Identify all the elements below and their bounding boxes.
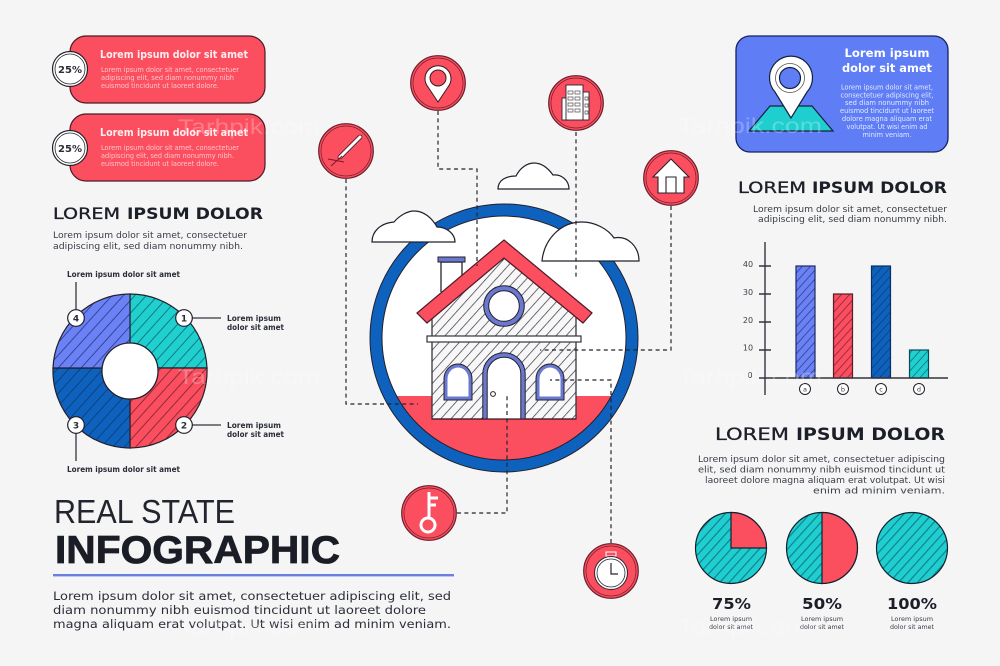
leader lines (76, 282, 221, 461)
blue card body: dolore magna aliquam erat (842, 115, 932, 123)
segment 3 blue (53, 368, 130, 448)
text block: pie section (698, 455, 946, 496)
stat: 100% (887, 595, 937, 631)
icon: stopwatch badge (584, 544, 638, 598)
connector: home (540, 206, 671, 350)
round window (486, 288, 522, 324)
card 2 body (101, 144, 239, 168)
donut label 3: Lorem ipsum dolor sit amet (67, 465, 180, 474)
blue card background (736, 36, 948, 152)
marker 4: 4 (73, 314, 79, 324)
stat: 75%: dolor sit amet (709, 623, 753, 631)
floor band (427, 336, 581, 342)
marker 2 (176, 417, 192, 433)
ground (397, 396, 611, 460)
chart: bars (743, 242, 948, 395)
axes (759, 242, 948, 395)
blue card title: Lorem ipsum (844, 46, 930, 60)
blue card body: Lorem ipsum dolor sit amet, (841, 84, 933, 92)
text block: pie section: elit, sed diam nonummy nibh euismod tincidunt ut (698, 466, 946, 476)
heading: bar chart section: IPSUM DOLOR (812, 178, 947, 197)
badge 25% second (52, 130, 88, 166)
text block: intro: Lorem ipsum dolor sit amet, consectetuer adipiscing elit, sed (53, 589, 451, 603)
y axis labels: 0 (747, 371, 753, 380)
y axis labels: 40 (743, 260, 753, 269)
donut label 2: Lorem ipsum (227, 421, 281, 430)
connector: pencil (346, 179, 418, 404)
right window (538, 366, 562, 398)
icon: map pin (749, 56, 833, 131)
text block: left section: adipiscing elit, sed diam nonummy nibh. (53, 242, 243, 252)
bar c (872, 266, 890, 378)
stat: 50%: dolor sit amet (800, 623, 844, 631)
heading: pie section: IPSUM DOLOR (796, 425, 945, 445)
heading: bar chart section: LOREM (738, 178, 806, 197)
badge 25%: 25% (58, 65, 82, 76)
watermarks: Tarhpik.com (178, 616, 320, 639)
donut label 1: dolor sit amet (227, 323, 284, 332)
icon: pin badge (411, 56, 465, 110)
chimney (438, 257, 465, 292)
watermarks: Tarhpik.com (678, 616, 822, 639)
x axis labels: b (841, 386, 845, 394)
marker 4 (68, 310, 84, 326)
donut label 2: dolor sit amet (227, 430, 284, 439)
bar a (796, 266, 815, 378)
roof (417, 240, 592, 323)
outer ring (376, 210, 632, 466)
icon: building badge (549, 76, 603, 130)
blue card body: volutpat. Ut wisi enim ad (846, 123, 928, 131)
stat: 75% (709, 595, 753, 631)
chart: pie 50% (786, 512, 858, 584)
stat: 75%: 75% (712, 595, 751, 613)
text block: intro (53, 589, 451, 631)
marker 3: 3 (73, 422, 79, 432)
x axis labels: d (917, 386, 921, 394)
y axis labels: 30 (743, 288, 753, 297)
connector: key (457, 393, 507, 513)
card background 1 (70, 36, 265, 103)
illustration: house in circle (370, 210, 640, 476)
watermarks: Tarhpik.com (178, 366, 320, 389)
left window (446, 366, 470, 398)
text block: left section (53, 231, 248, 252)
cloud: left (372, 211, 455, 242)
card 1 body: Lorem ipsum dolor sit amet, consectetuer (101, 66, 239, 74)
donut label 2 (227, 421, 284, 439)
blue card title (842, 46, 932, 75)
watermarks: Tarhpik.com (678, 366, 822, 389)
panel: red card 1 (52, 36, 265, 103)
title (54, 493, 340, 572)
card 2 body: adipiscing elit, sed diam nonummy nibh. (101, 152, 234, 160)
donut label 1 (227, 314, 284, 332)
card 2 body: Lorem ipsum dolor sit amet, consectetuer (101, 144, 239, 152)
donut label 4: Lorem ipsum dolor sit amet (67, 270, 180, 279)
donut hole (102, 343, 158, 399)
text block: left section: Lorem ipsum dolor sit amet, consectetuer (53, 231, 248, 241)
icon: pencil badge (319, 124, 373, 178)
stat: 50%: Lorem ipsum (801, 615, 843, 623)
stat: 100%: 100% (887, 595, 937, 613)
blue card body: sed diam nonummy nibh (845, 99, 929, 107)
stat: 100%: dolor sit amet (890, 623, 934, 631)
segment 1 teal (130, 294, 207, 368)
heading: left section: LOREM (53, 204, 120, 223)
blue card body (840, 84, 934, 139)
text block: pie section: enim ad minim veniam. (813, 486, 945, 496)
marker 2: 2 (181, 422, 187, 432)
title rule (53, 574, 454, 576)
chart: pie 100% (876, 512, 948, 584)
circle interior (380, 214, 628, 462)
house base line (432, 418, 576, 420)
heading: left section: IPSUM DOLOR (127, 204, 263, 223)
badge 25% (52, 52, 88, 86)
marker 1 (176, 310, 192, 326)
segment 2 red (130, 368, 207, 448)
text block: pie section: laoreet dolore magna aliquam erat volutpat. Ut wisi (705, 476, 945, 486)
card 1 body: euismod tincidunt ut laoreet dolore. (101, 82, 219, 90)
connector: clock (550, 380, 611, 543)
title: REAL STATE (54, 493, 235, 530)
icon: key badge (402, 486, 456, 540)
chart: pie 75% (696, 512, 766, 584)
watermarks: Tarhpik.com (678, 115, 822, 138)
stat: 100%: Lorem ipsum (891, 615, 933, 623)
text block: bar chart section (753, 205, 948, 225)
segment 4 periwinkle (53, 294, 130, 368)
text block: intro: magna aliquam erat volutpat. Ut wisi enim ad minim veniam. (53, 617, 451, 631)
y axis labels: 20 (743, 316, 753, 325)
donut label 1: Lorem ipsum (227, 314, 281, 323)
blue card body: euismod tincidunt ut laoreet (840, 107, 934, 115)
card background 2 (70, 114, 265, 181)
heading: bar chart section (738, 178, 947, 197)
door (485, 355, 523, 419)
badge 25% second: 25% (58, 144, 82, 155)
heading: pie section (715, 425, 945, 445)
x axis labels (800, 384, 924, 394)
stat: 75%: Lorem ipsum (710, 615, 752, 623)
heading: left section (53, 204, 263, 223)
blue card body: consectetuer adipiscing elit, (840, 92, 934, 100)
stat: 50%: 50% (802, 595, 842, 613)
bar d (910, 350, 928, 378)
blue card title: dolor sit amet (842, 61, 932, 75)
text block: bar chart section: adipiscing elit, sed diam nonummy nibh. (758, 215, 947, 225)
heading: pie section: LOREM (715, 425, 789, 445)
title: INFOGRAPHIC (55, 529, 340, 572)
icon: home badge (644, 151, 698, 205)
y axis labels (743, 260, 753, 380)
card 2 body: euismod tincidunt ut laoreet dolore. (101, 160, 219, 168)
chart: donut (53, 282, 221, 461)
y axis labels: 10 (743, 344, 753, 352)
connector: pin (438, 111, 477, 266)
panel: blue card (736, 36, 948, 152)
card 2 title: Lorem ipsum dolor sit amet (100, 127, 248, 139)
watermarks (178, 115, 822, 639)
x axis labels: a (803, 386, 807, 394)
marker 1: 1 (181, 314, 187, 324)
watermarks: Tarhpik.com (178, 116, 320, 139)
walls (432, 258, 576, 419)
x axis labels: c (879, 386, 883, 394)
bar b (834, 294, 852, 378)
text block: bar chart section: Lorem ipsum dolor sit amet, consectetuer (753, 205, 948, 215)
cloud: right (542, 222, 639, 261)
stat: 50% (800, 595, 844, 631)
card 1 title: Lorem ipsum dolor sit amet (100, 49, 248, 61)
cloud: top (498, 163, 569, 189)
card 1 body: adipiscing elit, sed diam nonummy nibh (101, 74, 234, 82)
text block: pie section: Lorem ipsum dolor sit amet, consectetuer adipiscing (698, 455, 945, 465)
card 1 body (101, 66, 239, 90)
connector: building (575, 132, 577, 280)
panel: red card 2 (52, 114, 265, 181)
blue card body: minim veniam. (862, 131, 912, 139)
text block: intro: diam nonummy nibh euismod tincidunt ut laoreet dolore (53, 603, 426, 617)
marker 3 (68, 417, 84, 433)
